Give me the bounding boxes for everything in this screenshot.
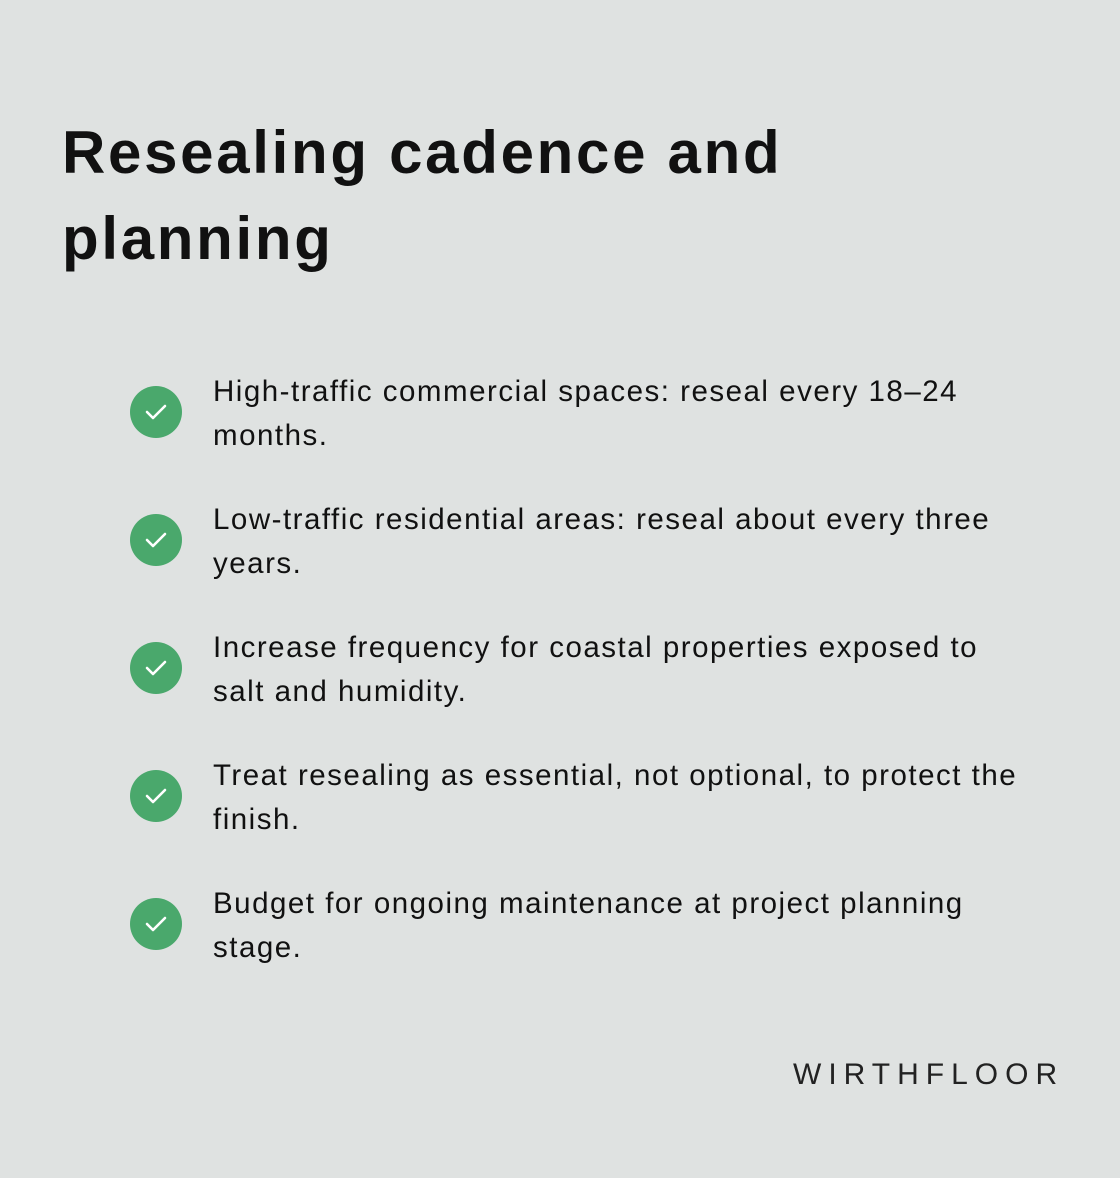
text: Treat resealing as essential, not optional, to protect the bbox=[213, 759, 1017, 792]
icon: check bbox=[130, 642, 182, 694]
icon: check bbox=[130, 770, 182, 822]
logo: WIRTHFLOOR bbox=[793, 1058, 1064, 1091]
text: months. bbox=[213, 419, 328, 452]
text: stage. bbox=[213, 931, 302, 964]
icon: check bbox=[130, 514, 182, 566]
item 5 bbox=[130, 887, 964, 964]
item 4 bbox=[130, 759, 1017, 836]
title bbox=[62, 119, 782, 272]
text: Budget for ongoing maintenance at project planning bbox=[213, 887, 964, 920]
item 2 bbox=[130, 503, 990, 580]
icon: check bbox=[130, 898, 182, 950]
text: years. bbox=[213, 547, 302, 580]
text bbox=[213, 503, 990, 580]
item 1 bbox=[130, 375, 958, 452]
text bbox=[213, 631, 978, 708]
text: High-traffic commercial spaces: reseal every 18–24 bbox=[213, 375, 958, 408]
text: finish. bbox=[213, 803, 301, 836]
title: planning bbox=[62, 205, 334, 272]
text: salt and humidity. bbox=[213, 675, 467, 708]
text: Low-traffic residential areas: reseal about every three bbox=[213, 503, 990, 536]
text bbox=[213, 759, 1017, 836]
item 3 bbox=[130, 631, 978, 708]
text: Increase frequency for coastal properties exposed to bbox=[213, 631, 978, 664]
icon: check bbox=[130, 386, 182, 438]
text bbox=[213, 887, 964, 964]
text bbox=[213, 375, 958, 452]
title: Resealing cadence and bbox=[62, 119, 782, 186]
